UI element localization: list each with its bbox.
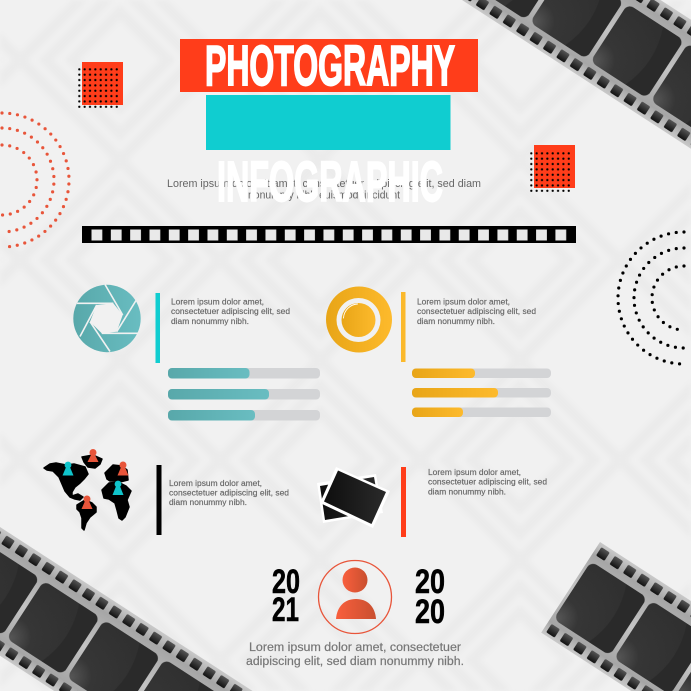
year: 2021: 20 xyxy=(272,563,300,601)
title: PHOTOGRAPHY: PHOTOGRAPHY xyxy=(205,34,455,98)
icon: person in circle xyxy=(318,560,392,634)
text block: lens: consectetuer adipiscing elit, sed xyxy=(417,307,536,316)
film strip: bottom left xyxy=(0,527,253,691)
text block: aperture: consectetuer adipiscing elit, sed xyxy=(171,307,290,316)
text block: aperture: diam nonummy nibh. xyxy=(171,317,249,326)
year: 2021: 21 xyxy=(272,591,299,629)
map pin: teal, Africa xyxy=(112,481,124,495)
dotted arcs: black, right xyxy=(618,232,684,364)
year: 2021 xyxy=(272,563,300,629)
intro text: Lorem ipsum dolor sit amet, consectetuer adipiscing elit, sed diam xyxy=(167,178,481,190)
icon: camera lens xyxy=(326,286,392,352)
text block: map xyxy=(169,479,289,507)
progress bars: teal xyxy=(168,368,320,420)
decorative square: right xyxy=(530,145,575,192)
text block: aperture xyxy=(171,298,290,326)
map pin: red, Greenland xyxy=(88,449,98,462)
year: 2020 xyxy=(415,563,445,631)
text block: aperture: Lorem ipsum dolor amet, xyxy=(171,298,264,306)
film strip: top right xyxy=(462,0,691,149)
accent bar: teal xyxy=(156,293,160,363)
text block: photos: Lorem ipsum dolor amet, xyxy=(428,468,521,477)
icon: photo prints xyxy=(317,467,390,528)
text block: map: diam nonummy nibh. xyxy=(169,498,247,507)
text block: map: Lorem ipsum dolor amet, xyxy=(169,479,262,488)
intro text: nonummy nibh euismod tincidunt xyxy=(248,190,400,202)
icon: world map with pins xyxy=(44,449,131,530)
text block: photos: consectetuer adipiscing elit, sed xyxy=(428,478,547,486)
title banner: red xyxy=(180,39,478,92)
map pin: red, South America xyxy=(82,496,92,509)
text block: photos xyxy=(428,468,547,496)
accent bar: gold xyxy=(401,292,406,362)
icon: camera aperture xyxy=(73,284,141,352)
text block: photos: diam nonummy nibh. xyxy=(428,488,506,496)
progress bars: gold xyxy=(412,368,551,417)
text block: lens: Lorem ipsum dolor amet, xyxy=(417,298,510,306)
title banner: teal xyxy=(206,95,450,150)
text block: lens xyxy=(417,298,536,326)
footer text: adipiscing elit, sed diam nonummy nibh. xyxy=(246,656,464,668)
footer text xyxy=(246,642,464,668)
year: 2020: 20 xyxy=(415,563,445,601)
accent bar: black xyxy=(156,465,162,535)
year: 2020: 20 xyxy=(415,593,445,631)
title: INFOGRAPHIC: INFOGRAPHIC xyxy=(217,150,443,214)
text block: map: consectetuer adipiscing elit, sed xyxy=(169,488,289,498)
intro text xyxy=(167,178,481,202)
map pin: teal, North America xyxy=(62,462,74,476)
dotted arcs: red, left xyxy=(2,113,69,247)
text block: lens: diam nonummy nibh. xyxy=(417,317,495,326)
accent bar: red xyxy=(401,467,406,537)
footer text: Lorem ipsum dolor amet, consectetuer xyxy=(249,642,461,654)
map pin: red, Europe xyxy=(118,462,128,476)
film strip: bottom right xyxy=(541,542,691,691)
decorative square: left xyxy=(78,62,123,108)
film bar divider xyxy=(82,226,576,243)
